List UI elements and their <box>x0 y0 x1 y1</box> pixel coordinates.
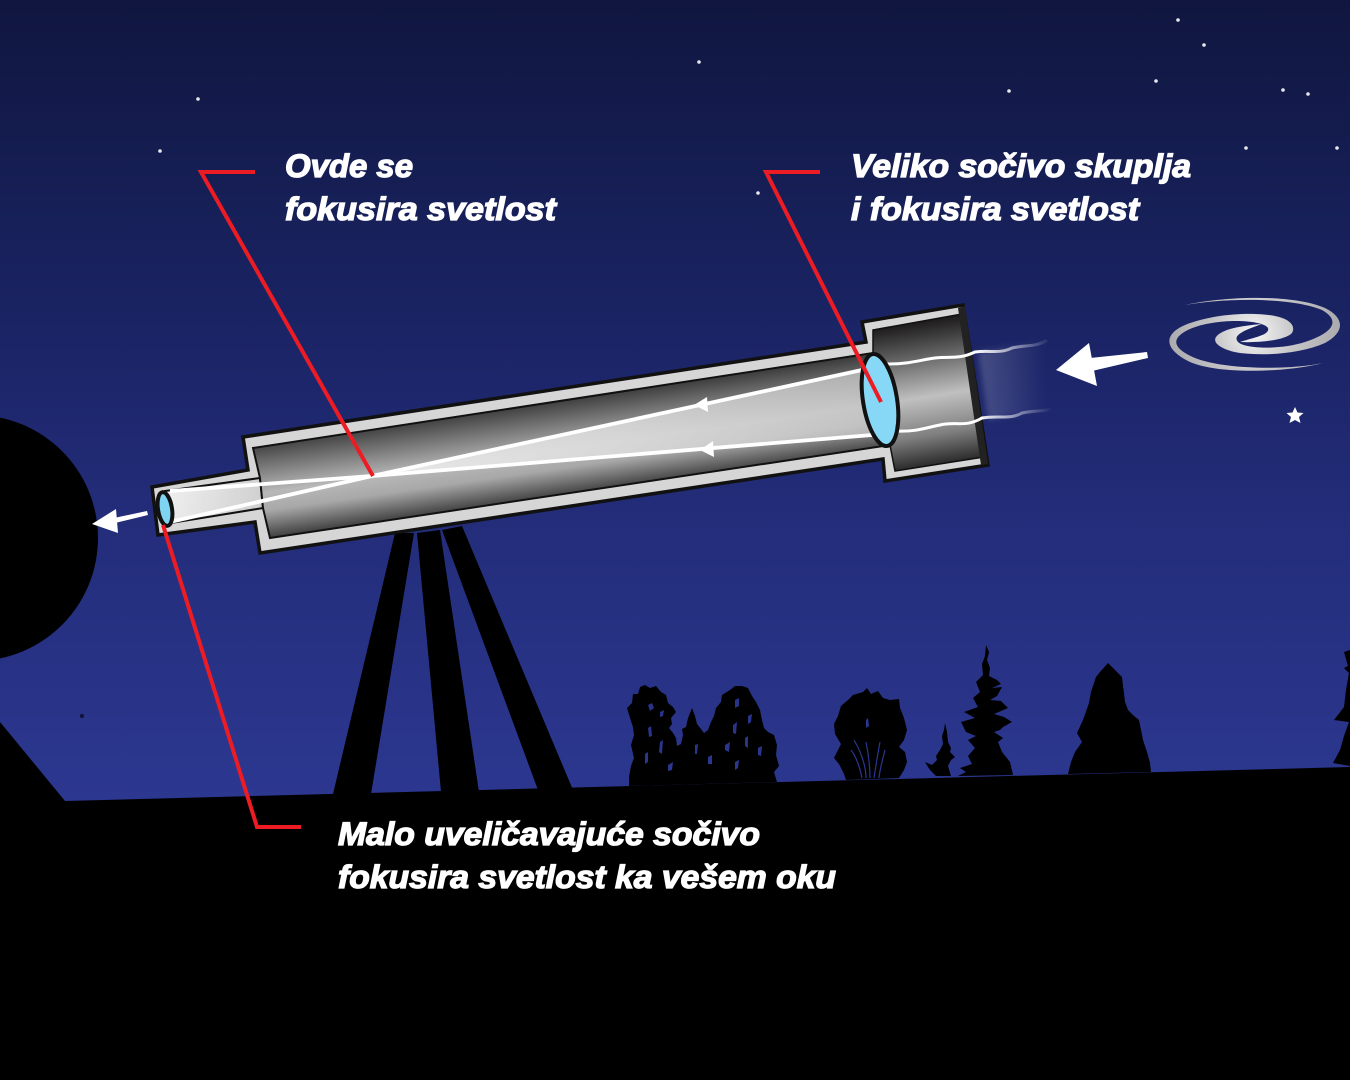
label: objective lens: i fokusira svetlost <box>851 191 1140 227</box>
tree round trunk branches <box>851 740 885 778</box>
callout line: eyepiece lens <box>163 525 301 827</box>
label: objective lens: Veliko sočivo skuplja <box>851 148 1191 184</box>
callout line: focal point <box>201 172 373 476</box>
label: objective lens <box>851 148 1191 227</box>
label: focal point: fokusira svetlost <box>285 191 557 227</box>
arrow: incoming light <box>1056 343 1148 386</box>
icon: spiral galaxy <box>1169 298 1340 371</box>
telescope <box>152 305 1056 553</box>
label: focal point: Ovde se <box>285 148 413 184</box>
trees <box>627 645 1350 786</box>
light rays inside the tube <box>170 370 872 522</box>
arrow: light to the eye <box>92 509 148 533</box>
tree round hole <box>866 718 869 728</box>
telescope body outline <box>152 305 988 553</box>
label: eyepiece lens: Malo uveličavajuće sočivo <box>338 816 760 852</box>
silhouette of viewer's head <box>0 415 98 661</box>
ground silhouette <box>0 722 1350 1080</box>
large conifer <box>1068 663 1151 774</box>
tall spruce <box>958 645 1013 776</box>
wavy incoming rays <box>888 341 1056 431</box>
small spruce <box>925 723 955 776</box>
icon: dim star <box>80 714 84 718</box>
eyepiece interior <box>165 478 263 524</box>
front rim <box>958 306 988 465</box>
tree group left <box>627 685 779 786</box>
front cell interior <box>873 314 984 471</box>
main tube interior <box>253 353 890 538</box>
light glow leaving aperture <box>978 342 1055 420</box>
ray arrowheads <box>694 397 714 457</box>
tree round middle <box>834 688 907 780</box>
tripod <box>333 526 573 794</box>
eyepiece lens <box>155 491 175 527</box>
stars <box>158 18 1339 195</box>
label: eyepiece lens: fokusira svetlost ka vešem oku <box>338 859 836 895</box>
conifer at right edge <box>1333 650 1350 766</box>
label: focal point <box>285 148 557 227</box>
label: eyepiece lens <box>338 816 836 895</box>
objective lens <box>856 351 904 449</box>
icon: bright star <box>1286 407 1304 423</box>
callout line: objective lens <box>766 172 881 402</box>
light cone <box>372 371 872 476</box>
